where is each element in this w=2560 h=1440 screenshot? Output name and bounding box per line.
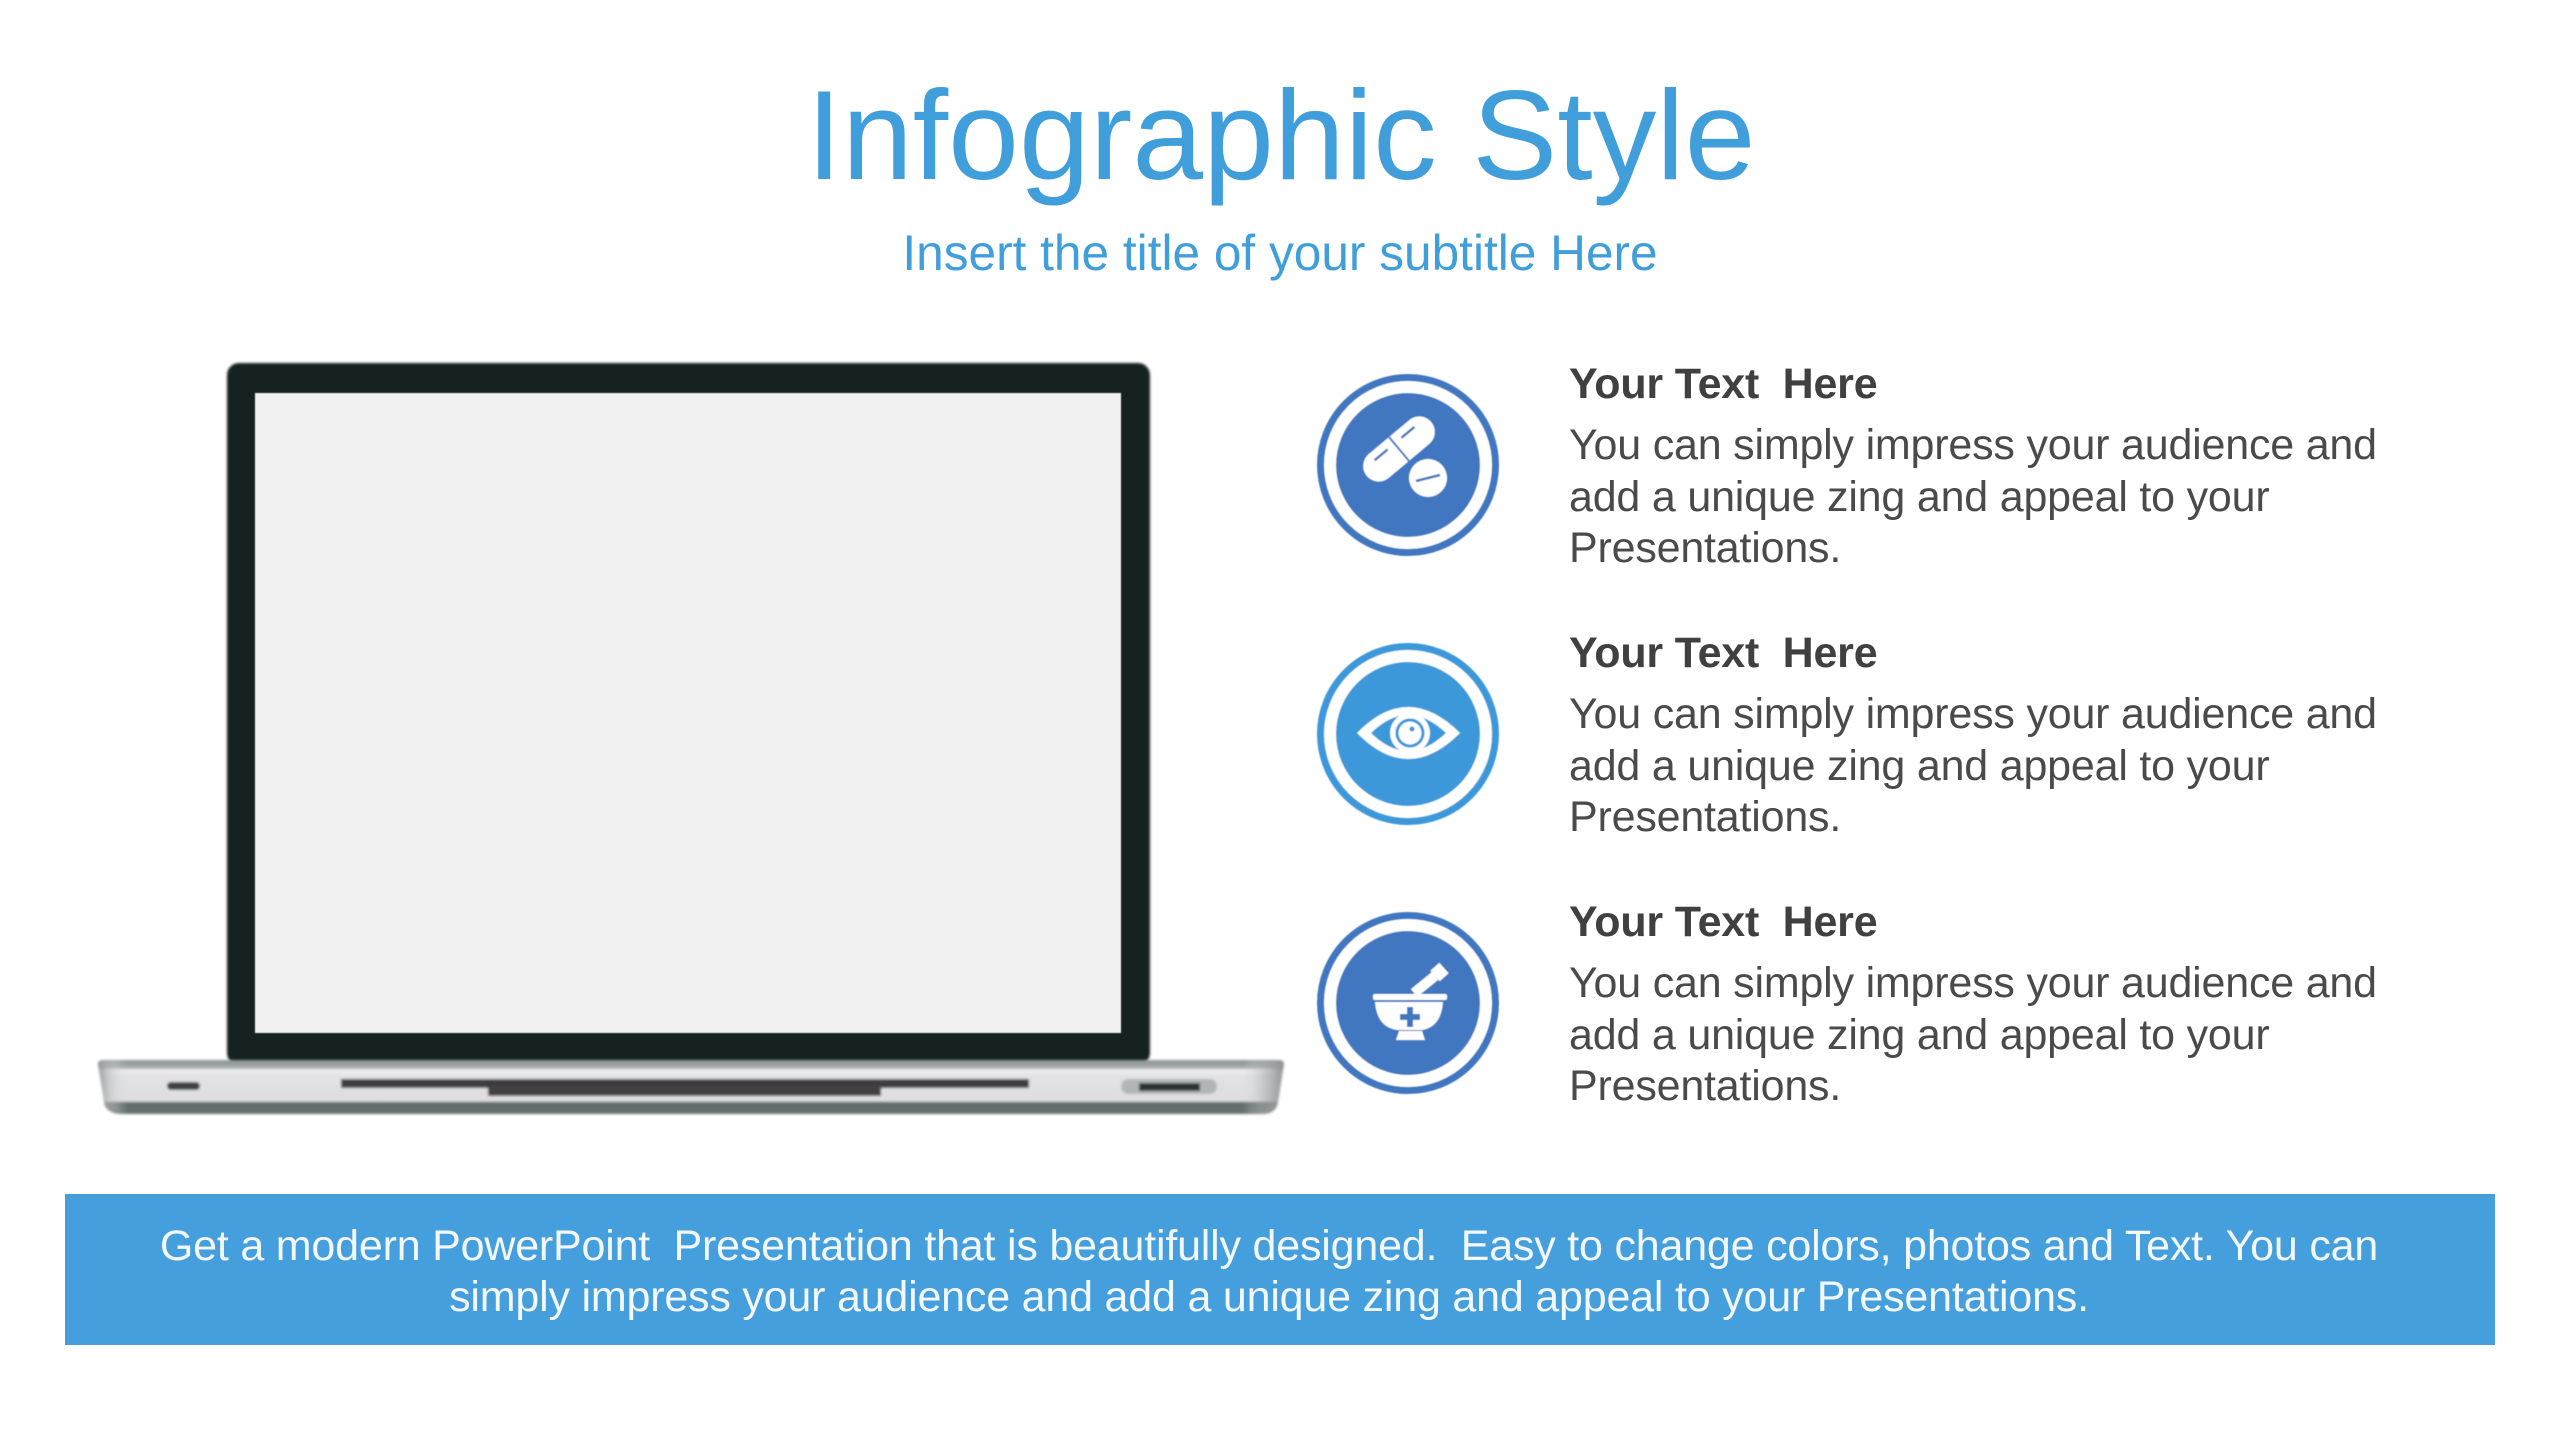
text: item 2: Presentations. xyxy=(1569,793,1841,841)
text: item 1: Presentations. xyxy=(1569,524,1841,572)
item 2 xyxy=(1320,629,2377,841)
text: item 1: Your Text Here xyxy=(1569,360,1877,408)
text: item 1 xyxy=(1569,360,2377,572)
footer text: Get a modern PowerPoint Presentation that is beautifully designed. Easy to change colors, photos and Text. You can xyxy=(160,1222,2378,1270)
icon: eye xyxy=(1320,646,1496,822)
subtitle: Insert the title of your subtitle Here xyxy=(902,225,1658,281)
text: item 1: You can simply impress your audience and xyxy=(1569,421,2377,469)
text: item 2: You can simply impress your audience and xyxy=(1569,690,2377,738)
laptop lid and bezel xyxy=(227,363,1150,1065)
icon: pills xyxy=(1320,378,1496,552)
text: item 3: Presentations. xyxy=(1569,1062,1841,1110)
laptop base xyxy=(98,1060,1284,1114)
text: item 3: add a unique zing and appeal to your xyxy=(1569,1011,2269,1059)
footer text xyxy=(160,1222,2378,1321)
item 3 xyxy=(1320,898,2377,1110)
text: item 3: Your Text Here xyxy=(1569,898,1877,946)
laptop illustration xyxy=(98,363,1284,1114)
laptop screen xyxy=(255,393,1121,1033)
text: item 3: You can simply impress your audience and xyxy=(1569,959,2377,1007)
footer banner xyxy=(65,1194,2495,1345)
title: Infographic Style xyxy=(807,64,1755,206)
text: item 3 xyxy=(1569,898,2377,1110)
footer text: simply impress your audience and add a unique zing and appeal to your Presentations. xyxy=(449,1273,2089,1321)
item 1 xyxy=(1320,360,2377,572)
text: item 2 xyxy=(1569,629,2377,841)
text: item 2: add a unique zing and appeal to your xyxy=(1569,742,2269,790)
text: item 2: Your Text Here xyxy=(1569,629,1877,677)
text: item 1: add a unique zing and appeal to your xyxy=(1569,473,2269,521)
icon: mortar and pestle xyxy=(1320,916,1496,1090)
